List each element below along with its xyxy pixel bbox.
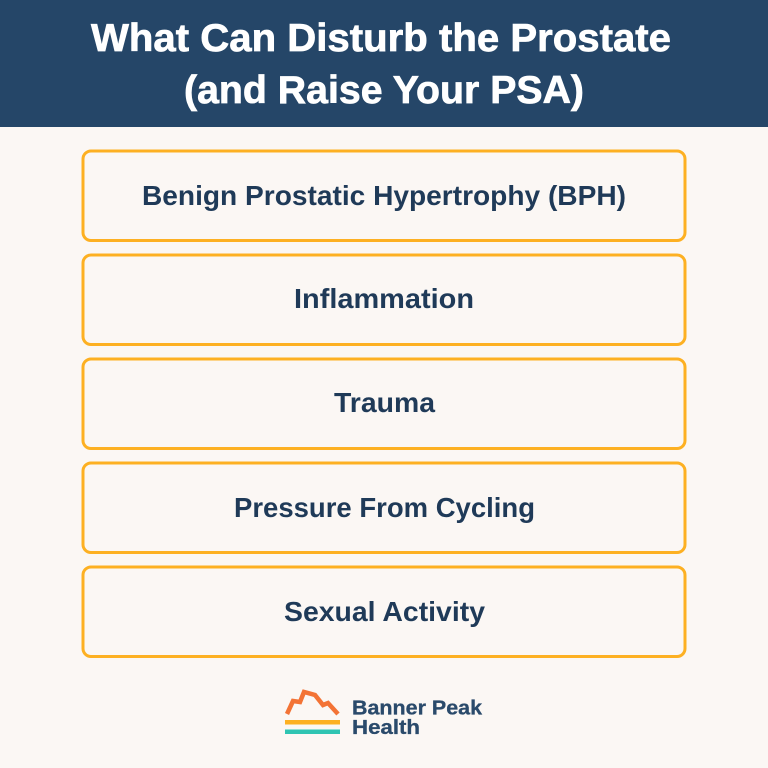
icon: gold bar [285, 720, 340, 724]
item: Sexual Activity [83, 567, 685, 656]
logo text: Health [352, 717, 420, 739]
logo: Banner Peak Health [285, 692, 483, 739]
title: (and Raise Your PSA) [184, 69, 584, 112]
item: Benign Prostatic Hypertrophy [83, 151, 685, 240]
icon: teal bar [285, 730, 340, 734]
logo text: Banner Peak [352, 698, 483, 720]
panel: list of causes [83, 151, 685, 656]
item: Inflammation [83, 255, 685, 344]
item: Trauma [83, 359, 685, 448]
item: Inflammation: Inflammation [294, 283, 474, 314]
logo text [352, 698, 483, 739]
item: Trauma: Trauma [334, 387, 436, 418]
title: What Can Disturb the Prostate [91, 17, 671, 60]
item: Pressure From Cycling [83, 463, 685, 552]
item: Sexual Activity: Sexual Activity [284, 596, 486, 627]
icon: mountain [287, 692, 338, 714]
title [91, 17, 671, 112]
header banner [0, 0, 768, 127]
item: Benign Prostatic Hypertrophy: Benign Prostatic Hypertrophy (BPH) [142, 180, 626, 211]
item: Pressure From Cycling: Pressure From Cycling [234, 492, 535, 523]
